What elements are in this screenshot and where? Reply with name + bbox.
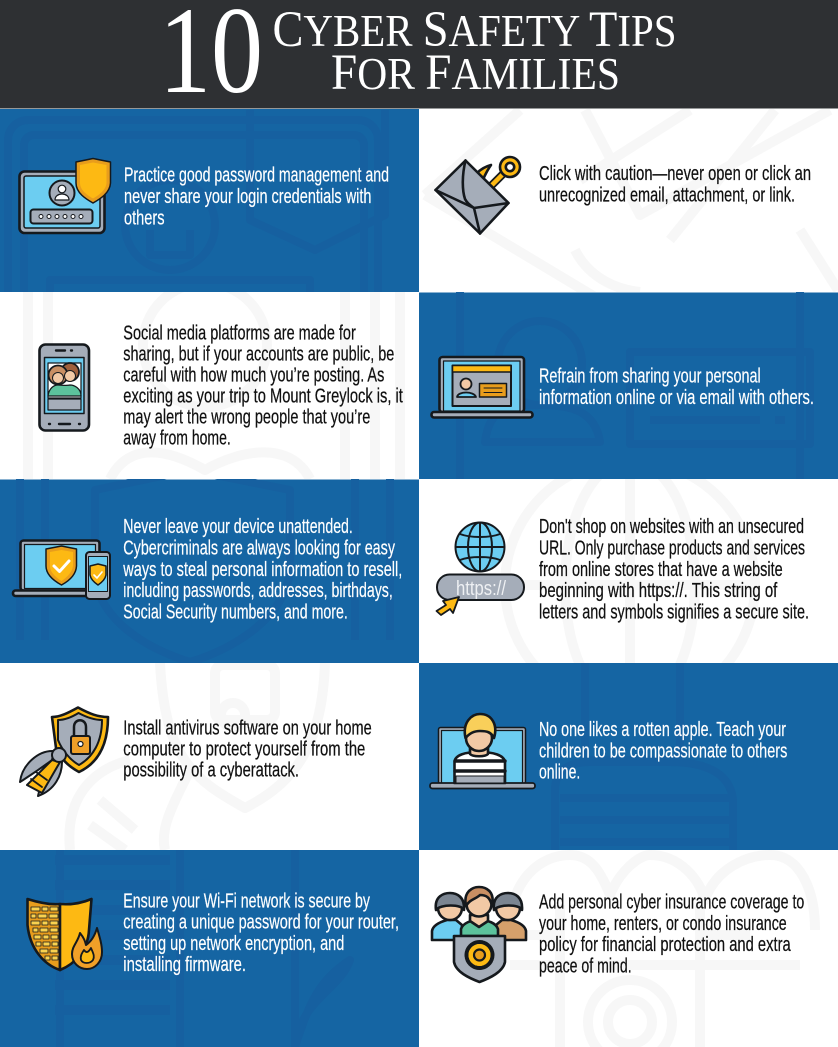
text: tip 7: computer to protect yourself from the [123, 738, 365, 761]
icon: three people with gear shield [432, 887, 526, 982]
title: Cyber Safety Tips: CYBER SAFETY TIPS [272, 2, 676, 58]
text: tip 5: ways to steal personal information to resell, [123, 558, 402, 581]
icon: person in laptop screen [430, 714, 535, 788]
panel: wi-fi security [0, 850, 419, 1047]
panel: password management [0, 109, 419, 292]
text: tip 9: Ensure your Wi-Fi network is secure by [123, 889, 371, 912]
text: tip 1: never share your login credentials with [124, 185, 372, 208]
panel: social media [38, 324, 403, 449]
text: tip 1 [124, 164, 389, 229]
panel: secure URL [436, 518, 808, 623]
text: tip 9 [123, 889, 399, 976]
text: tip 6 [539, 515, 809, 623]
panel: personal information [419, 292, 838, 479]
text: tip 3: careful with how much you’re posting. As [123, 363, 384, 386]
panel: compassion [419, 663, 838, 850]
panel: cyber insurance [430, 886, 804, 984]
text: tip 1: Practice good password management and [124, 164, 389, 186]
text: tip 3: sharing, but if your accounts are public, be [123, 342, 394, 365]
text: tip 7 [123, 716, 372, 782]
icon: phishing email with hook [436, 157, 520, 234]
panel: click with caution [434, 154, 810, 235]
panel: antivirus [19, 706, 372, 797]
title: For Families: FOR FAMILIES [331, 45, 620, 101]
header banner [0, 0, 838, 119]
text: tip 3: exciting as your trip to Mount Greylock is, it [123, 384, 403, 408]
text: tip 3: Social media platforms are made for [123, 321, 356, 344]
text: tip 9: creating a unique password for your router, [123, 911, 399, 934]
text: tip 1: others [124, 206, 164, 229]
text: tip 5 [123, 515, 402, 623]
text: tip 5: including passwords, addresses, birthdays, [123, 579, 393, 602]
icon: laptop with user profile [432, 357, 532, 418]
icon: laptop and phone with shields [13, 540, 110, 599]
text: tip 9: setting up network encryption, and [123, 932, 344, 955]
panel: unattended device [0, 470, 419, 663]
text: tip 9: installing firmware. [123, 953, 246, 976]
text: tip 4 [539, 365, 814, 409]
text: tip 3 [123, 321, 403, 450]
icon: login screen with shield [20, 158, 110, 233]
text: https label: https:// [456, 578, 506, 600]
icon: smartphone with profile photo [40, 344, 89, 430]
text: tip 3: away from home. [123, 427, 231, 450]
text: tip 8: online. [539, 761, 580, 784]
text: tip 5: Cybercriminals are always looking for easy [123, 537, 396, 560]
text: tip 8 [539, 718, 787, 784]
icon: firewall shield with flame [28, 899, 102, 970]
icon: shield with lock and bug [20, 708, 108, 796]
text: tip 3: may alert the wrong people that you’re [123, 406, 370, 429]
text: tip 10: peace of mind. [539, 955, 632, 978]
text: tip 10 [539, 891, 804, 978]
icon: globe and https bar [436, 522, 524, 615]
text: tip 2 [539, 162, 811, 206]
text: tip 5: Social Security numbers, and more. [123, 600, 348, 623]
text: tip 7: possibility of a cyberattack. [123, 759, 299, 782]
text: tip 7: Install antivirus software on your home [123, 716, 372, 739]
text: tip 5: Never leave your device unattended. [123, 515, 353, 538]
